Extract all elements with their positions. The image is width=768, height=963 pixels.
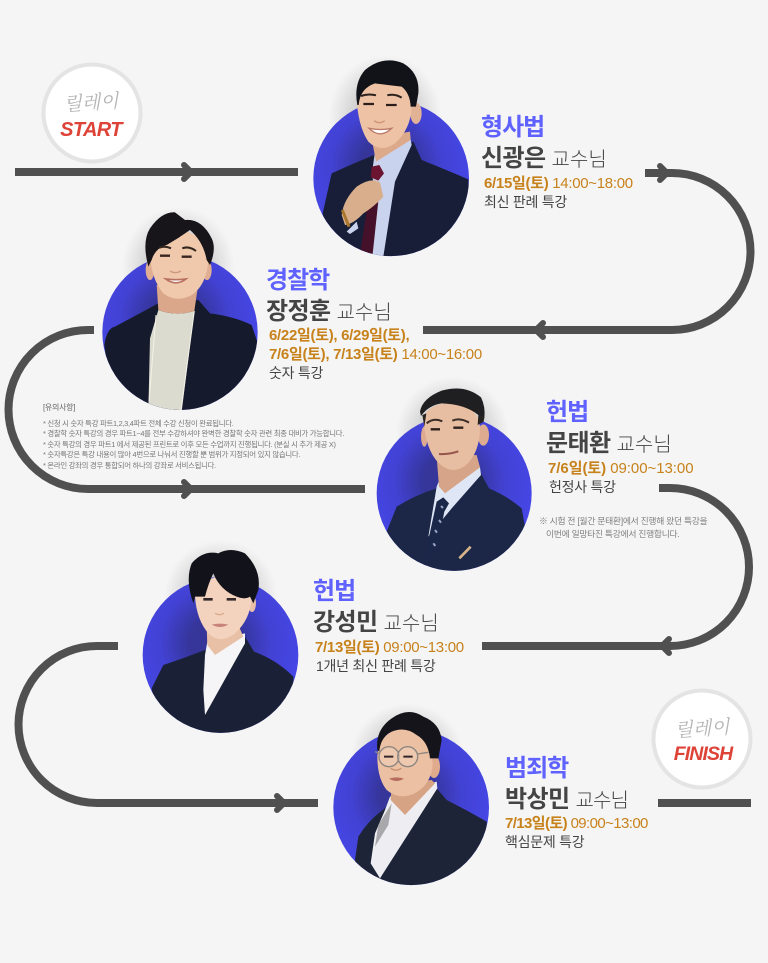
instructor info: 신광은: 6/15일(토) 14:00~18:00 [484, 175, 633, 192]
instructor info: 신광은: 신광은 교수님 [481, 145, 607, 172]
portrait: 박상민 [333, 710, 489, 886]
exam note: 이번에 일망타진 특강에서 진행합니다. [546, 529, 679, 539]
instructor info: 강성민: 7/13일(토) 09:00~13:00 [315, 639, 464, 656]
portrait: 강성민 [142, 546, 298, 733]
instructor info: 장정훈: 숫자 특강 [269, 365, 323, 381]
exam note: ※ 시험 전 [월간 문태환]에서 진행해 왔던 특강을 [539, 516, 707, 526]
route line: third curve [482, 488, 749, 653]
instructor info: 장정훈: 7/6일(토), 7/13일(토) 14:00~16:00 [269, 346, 482, 363]
instructor info: 강성민: 헌법 [313, 578, 355, 605]
instructor info: 문태환 [546, 399, 694, 495]
notice text: * 숫자특강은 특강 내용이 많아 4번으로 나눠서 진행할 뿐 범위가 지정되어 있지 않습니다. [43, 450, 300, 459]
notice text: * 숫자 특강의 경우 파트1 에서 제공된 프린트로 이후 모든 수업까지 진행됩니다. (분실 시 추가 제공 X) [43, 440, 336, 449]
instructor info: 신광은: 형사법 [481, 114, 544, 141]
route chevron: second curve [184, 482, 191, 496]
route line: first curve [423, 166, 750, 337]
instructor info: 장정훈: 6/22일(토), 6/29일(토), [269, 327, 409, 344]
notice text [43, 403, 344, 470]
instructor info: 장정훈 [266, 267, 482, 381]
badge: finish [654, 690, 750, 788]
instructor info: 강성민 [313, 578, 464, 674]
route line: finish [658, 799, 751, 807]
instructor info: 문태환: 헌법 [546, 399, 588, 426]
portrait: 장정훈 [102, 207, 258, 418]
exam note [539, 516, 708, 539]
instructor info: 강성민: 강성민 교수님 [313, 609, 439, 636]
badge: finish: 릴레이 [673, 712, 732, 743]
badge: start [44, 64, 140, 162]
instructor info: 장정훈: 장정훈 교수님 [266, 298, 392, 325]
instructor info: 신광은: 최신 판례 특강 [484, 194, 567, 210]
route chevron: fourth curve [277, 796, 284, 810]
instructor info: 박상민: 범죄학 [505, 755, 568, 782]
instructor info: 문태환: 7/6일(토) 09:00~13:00 [548, 460, 694, 477]
instructor info: 박상민 [505, 755, 648, 850]
portrait: 문태환 [376, 383, 532, 571]
instructor info: 박상민: 7/13일(토) 09:00~13:00 [505, 815, 648, 832]
instructor info: 박상민: 핵심문제 특강 [505, 834, 584, 850]
route line: fourth curve [18, 646, 318, 810]
badge: start: 릴레이 [62, 86, 121, 117]
route chevron: third curve [662, 639, 669, 653]
instructor info: 박상민: 박상민 교수님 [505, 786, 628, 813]
notice text: * 경찰학 숫자 특강의 경우 파트1~4를 전부 수강하셔야 완벽한 경찰학 숫자 관련 최종 대비가 가능합니다. [43, 429, 344, 438]
portrait: 신광은 [313, 55, 472, 263]
badge: finish: FINISH [674, 743, 734, 765]
notice text: * 신청 시 숫자 특강 파트1,2,3,4파트 전체 수강 신청이 완료됩니다. [43, 419, 234, 428]
badge: start: START [60, 119, 124, 141]
instructor info: 신광은 [481, 114, 633, 210]
notice text: * 온라인 강좌의 경우 통합되어 하나의 강좌로 서비스됩니다. [43, 461, 216, 470]
instructor info: 강성민: 1개년 최신 판례 특강 [316, 658, 436, 674]
instructor info: 문태환: 헌정사 특강 [549, 479, 616, 495]
route chevron: start [184, 165, 191, 179]
route line: start [15, 165, 298, 179]
instructor info: 문태환: 문태환 교수님 [546, 430, 672, 457]
route chevron: first curve [536, 166, 667, 337]
notice text: [유의사항] [43, 403, 75, 412]
instructor info: 장정훈: 경찰학 [266, 267, 329, 294]
route line: second curve [8, 330, 365, 496]
